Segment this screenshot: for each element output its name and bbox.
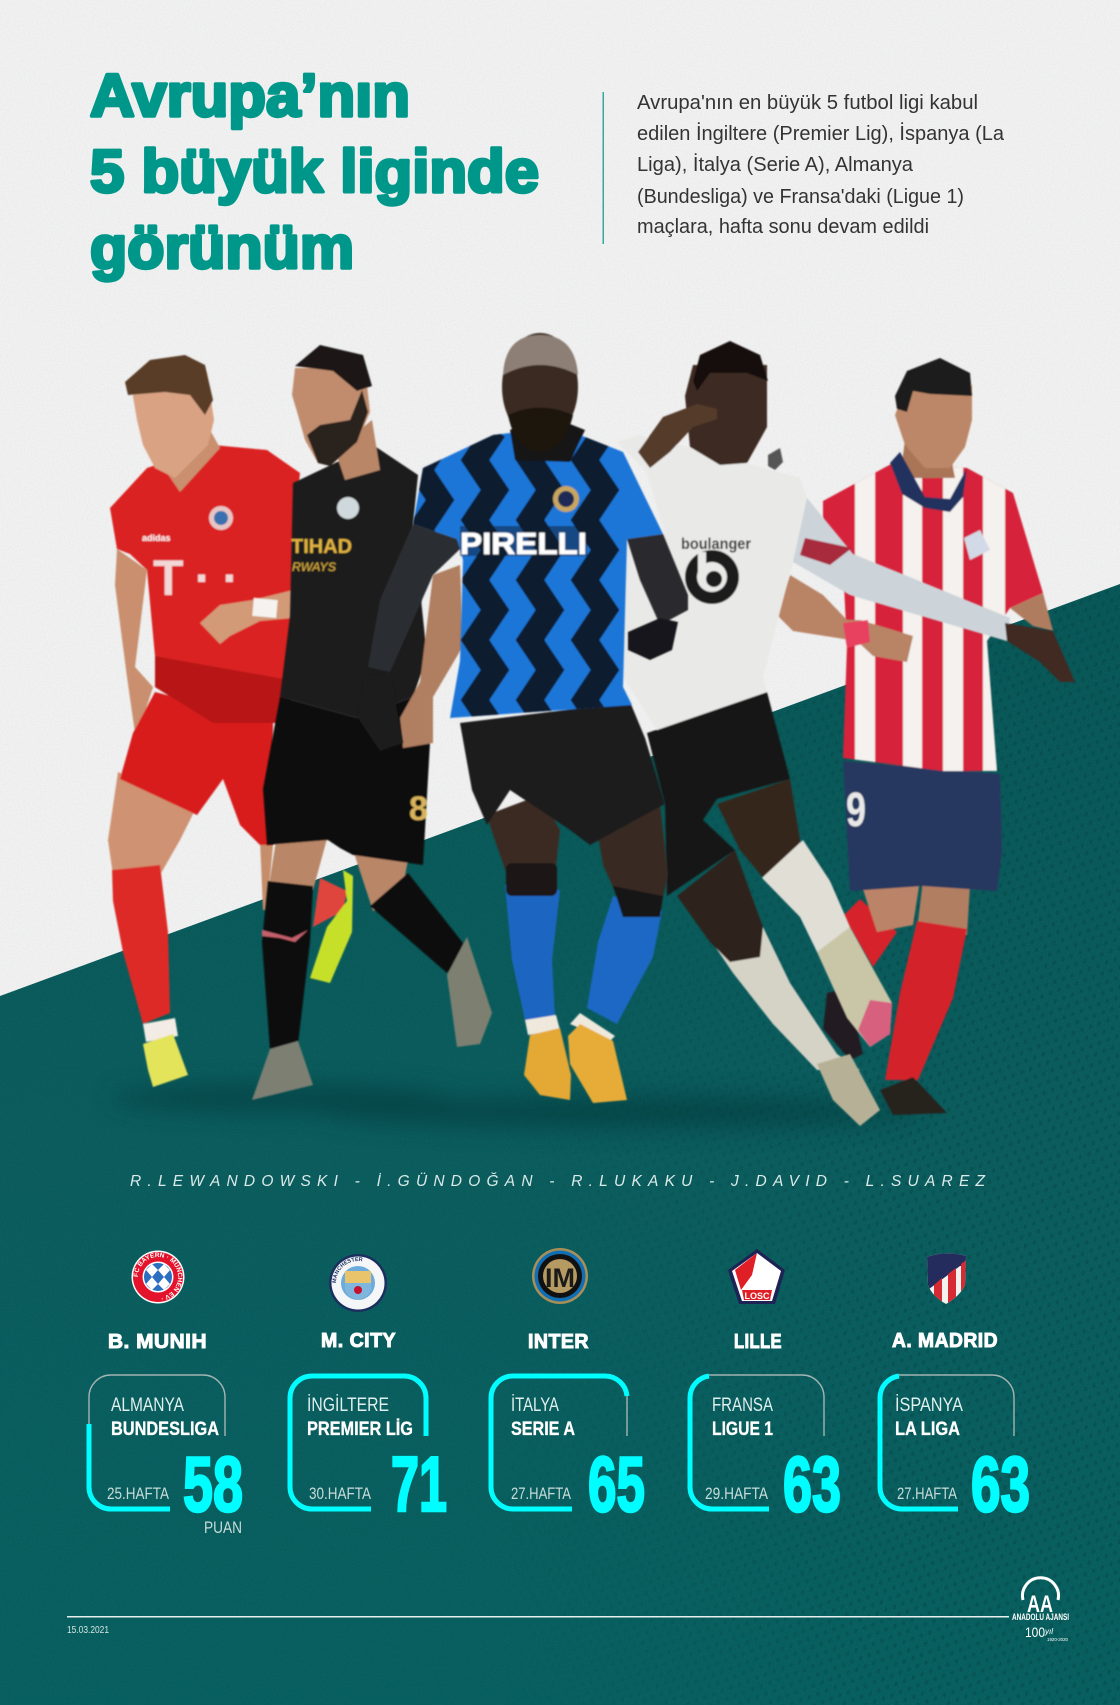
icon: Manchester City badge <box>329 1254 387 1312</box>
title: görünüm <box>90 214 354 281</box>
club: Inter: 65 <box>588 1440 645 1528</box>
club: Bayern Munich: 25.HAFTA <box>107 1485 169 1503</box>
icon: Atletico Madrid badge <box>927 1253 966 1304</box>
club: Atletico Madrid: 63 <box>971 1440 1030 1528</box>
club: Inter <box>491 1248 645 1528</box>
jersey details: Lille: boulanger <box>681 536 751 553</box>
club: Atletico Madrid: 27.HAFTA <box>897 1485 957 1503</box>
logo: Anadolu Ajansi: AA <box>1027 1591 1053 1618</box>
date: 15.03.2021 <box>67 1625 109 1636</box>
player: Gündoğan <box>252 345 492 1100</box>
jersey details: Manchester City: TIHAD <box>291 536 352 558</box>
logo: Anadolu Ajansi: ANADOLU AJANSI <box>1012 1612 1069 1622</box>
club: Bayern Munich: PUAN <box>204 1519 242 1537</box>
club: Atletico Madrid: İSPANYA <box>895 1395 963 1416</box>
player: Gündoğan: 8 <box>409 790 428 828</box>
club: Manchester City <box>288 1254 447 1528</box>
club: Lille: LILLE <box>734 1331 782 1353</box>
club: Lille: LIGUE 1 <box>712 1419 773 1440</box>
title: Avrupa’nın <box>90 62 410 129</box>
club: Inter: İTALYA <box>511 1395 559 1416</box>
club: Lille: 29.HAFTA <box>705 1485 768 1503</box>
logo: Anadolu Ajansi: yıl <box>1044 1627 1053 1636</box>
club: Inter: 27.HAFTA <box>511 1485 571 1503</box>
player: Lewandowski <box>108 355 353 1087</box>
logo: Anadolu Ajansi: 1920-2020 <box>1047 1637 1068 1642</box>
icon: Manchester City badge: MANCHESTER <box>332 1257 362 1283</box>
logo: Anadolu Ajansi <box>1012 1578 1069 1642</box>
club: Manchester City: 71 <box>391 1440 447 1528</box>
intro paragraph: maçlara, hafta sonu devam edildi <box>637 216 929 238</box>
club: Atletico Madrid: LA LIGA <box>895 1419 960 1440</box>
club: Bayern Munich: ALMANYA <box>111 1395 184 1416</box>
icon: Lille badge: LOSC <box>744 1291 770 1301</box>
icon: Inter badge: IM <box>545 1263 575 1293</box>
club: Inter: SERIE A <box>511 1419 575 1440</box>
jersey details: Manchester City <box>291 497 359 574</box>
intro paragraph: edilen İngiltere (Premier Lig), İspanya (La <box>637 122 1005 145</box>
club: Bayern Munich <box>86 1250 243 1537</box>
teal diagonal background panel <box>0 584 1120 1705</box>
icon: Bayern badge: FC BAYERN · MÜNCHEN EV · <box>133 1252 182 1300</box>
club: Atletico Madrid: A. MADRID <box>892 1330 998 1352</box>
player: Suarez: 9 <box>846 784 866 837</box>
title <box>90 62 539 281</box>
logo: Anadolu Ajansi: 100 <box>1025 1624 1045 1640</box>
intro paragraph: Liga), İtalya (Serie A), Almanya <box>637 153 914 176</box>
jersey details: Bayern: T·· <box>153 550 239 606</box>
player: David <box>617 341 1075 1126</box>
club: Manchester City: 30.HAFTA <box>309 1485 371 1503</box>
player: Suarez <box>775 358 1055 1115</box>
jersey details: Inter: PIRELLI <box>460 526 587 561</box>
title: 5 büyük liginde <box>90 138 539 205</box>
club: Lille: FRANSA <box>712 1395 773 1416</box>
club: Inter: INTER <box>528 1331 589 1353</box>
club: Bayern Munich: 58 <box>183 1440 243 1528</box>
jersey details: Bayern: adidas <box>142 533 171 543</box>
jersey details: Manchester City: RWAYS <box>292 560 336 574</box>
club: Manchester City: İNGİLTERE <box>307 1395 389 1416</box>
intro paragraph: Avrupa'nın en büyük 5 futbol ligi kabul <box>637 92 978 114</box>
club: Bayern Munich: BUNDESLIGA <box>111 1419 219 1440</box>
jersey details: Lille <box>681 448 783 604</box>
jersey details: Inter <box>460 486 587 561</box>
club: Manchester City: PREMIER LİG <box>307 1419 413 1440</box>
club: Lille: 63 <box>783 1440 841 1528</box>
player names: R.LEWANDOWSKI - İ.GÜNDOĞAN - R.LUKAKU - J.DAVID - L.SUAREZ <box>130 1172 986 1190</box>
intro paragraph: (Bundesliga) ve Fransa'daki (Ligue 1) <box>637 186 964 208</box>
club: Lille <box>690 1249 841 1528</box>
intro paragraph <box>637 92 1005 238</box>
jersey details: Bayern <box>142 506 239 606</box>
icon: Inter badge <box>532 1248 588 1304</box>
player: Lukaku <box>358 333 688 1103</box>
icon: Lille badge <box>728 1249 785 1304</box>
club: Atletico Madrid <box>880 1250 1030 1528</box>
club: Manchester City: M. CITY <box>321 1330 396 1352</box>
club: Bayern Munich: B. MUNIH <box>108 1331 207 1353</box>
ground shadow under players <box>110 1084 920 1128</box>
